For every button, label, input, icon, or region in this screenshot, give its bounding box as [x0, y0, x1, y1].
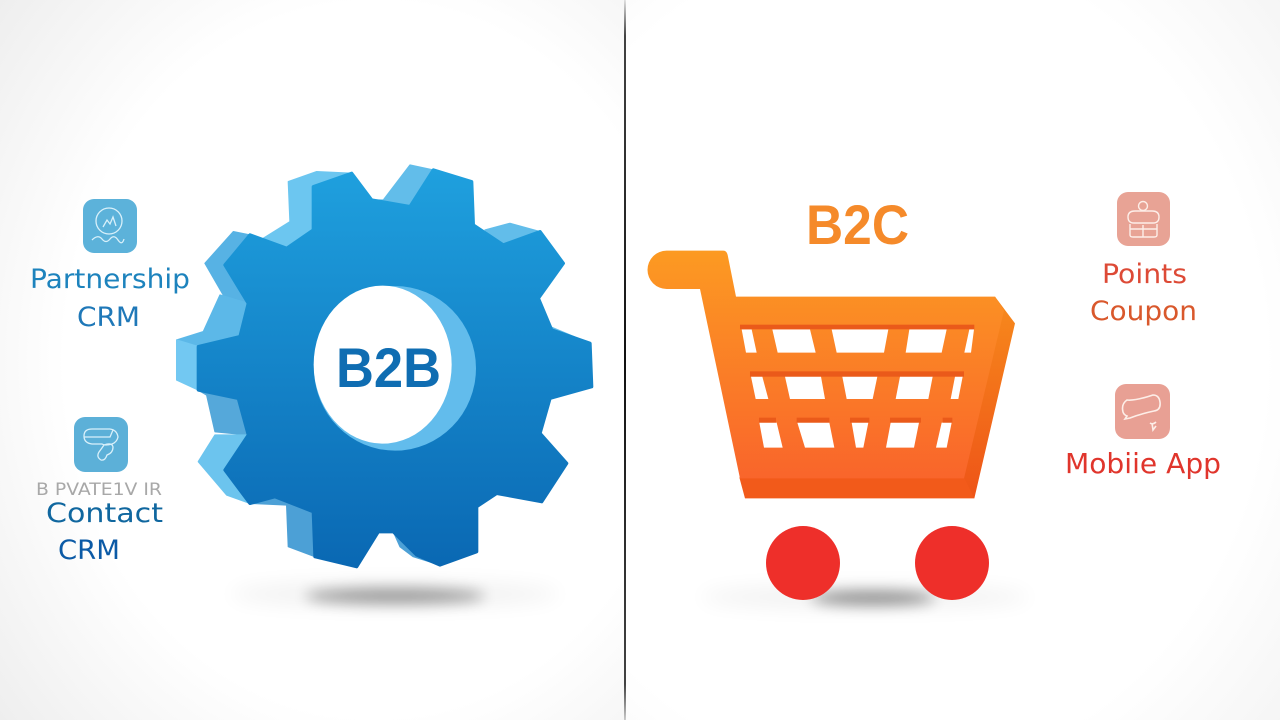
background: right panel — [625, 0, 1280, 720]
gear hole white — [314, 286, 452, 444]
cart side face — [960, 297, 1015, 498]
label: CRM: CRM — [58, 535, 120, 566]
B2B label: B2B — [336, 336, 441, 399]
gear hole inner wall — [314, 286, 476, 451]
label: Mobiie App: Mobiie App — [1065, 447, 1221, 480]
B2C heading: B2C — [806, 193, 909, 256]
shopping cart icon — [648, 251, 1015, 498]
icon: mobile app — [1115, 384, 1170, 439]
label: Coupon: Coupon — [1090, 296, 1197, 327]
item: Contact CRM — [36, 417, 163, 566]
cart basket and handle — [648, 251, 1004, 478]
item: Points Coupon — [1090, 192, 1197, 327]
B2B gear icon — [177, 165, 592, 567]
B2C cart ground shadow — [700, 585, 1030, 609]
icon: partnership — [83, 199, 137, 253]
faint label: B PVATE1V IR — [36, 480, 162, 500]
gear front face — [198, 170, 592, 567]
center divider line — [624, 0, 626, 720]
cart left wheel — [766, 526, 840, 600]
cart dark rails — [740, 325, 974, 423]
gear 3D side faces — [177, 165, 590, 565]
gear ground shadow — [230, 581, 560, 607]
label: CRM: CRM — [77, 302, 140, 333]
item: Partnership CRM — [30, 199, 190, 333]
background: left panel — [0, 0, 625, 720]
label: Contact: Contact — [46, 498, 163, 529]
label: Points: Points — [1102, 259, 1187, 290]
label: Partnership: Partnership — [30, 264, 190, 295]
cart right wheel — [915, 526, 989, 600]
icon: contact — [74, 417, 128, 472]
icon: points gift — [1117, 192, 1170, 246]
item: Mobile App — [1065, 384, 1221, 480]
cart bottom band — [739, 477, 974, 498]
